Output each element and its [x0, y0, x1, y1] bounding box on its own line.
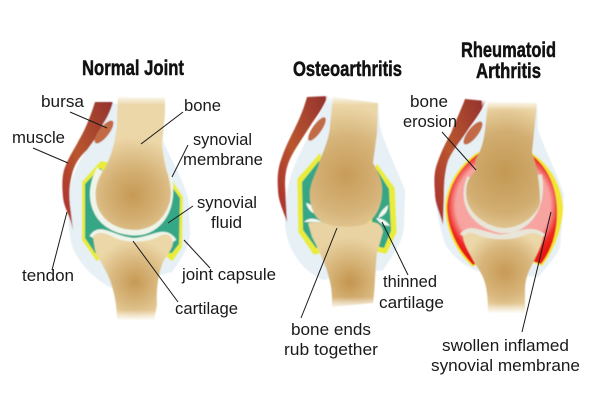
- muscle: [278, 96, 328, 222]
- upper bone: [96, 97, 171, 230]
- bursa: [460, 119, 486, 147]
- label: cartilage: [133, 241, 238, 318]
- upper bone fade: [112, 95, 170, 105]
- lower cartilage: [463, 232, 543, 238]
- label: thinned cartilage: [379, 222, 444, 312]
- label: synovial fluid: fluid: [211, 213, 242, 232]
- upper bone fade: [482, 100, 542, 110]
- synovial fluid left: [302, 161, 325, 248]
- title: Osteoarthritis: Osteoarthritis: [293, 58, 402, 81]
- joint capsule: [285, 97, 405, 280]
- upper cartilage: [468, 175, 539, 229]
- label: swollen inflamed synovial membrane: [431, 212, 580, 375]
- label: muscle: [12, 128, 68, 163]
- label: thinned cartilage: cartilage: [379, 293, 444, 312]
- lower bone: [463, 233, 543, 313]
- label: cartilage: cartilage: [175, 299, 238, 318]
- title: Rheumatoid Arthritis: Rheumatoid: [461, 39, 556, 62]
- label: joint capsule: joint capsule: [181, 265, 276, 284]
- lower bone fade: [112, 310, 162, 321]
- diagram: rheumatoid arthritis joint: [434, 99, 564, 314]
- label: bone erosion: bone: [410, 92, 448, 111]
- label: bursa: [41, 92, 107, 128]
- label: bone ends rub together: bone ends: [291, 320, 371, 339]
- label: synovial membrane: [172, 130, 263, 177]
- synovial fluid right: [372, 170, 391, 248]
- thinned cartilage right: [376, 205, 390, 226]
- title: Normal Joint: Normal Joint: [82, 57, 184, 80]
- lower bone: [308, 222, 383, 307]
- muscle: [62, 102, 113, 230]
- label: tendon: [22, 212, 74, 285]
- label: joint capsule: [181, 240, 276, 284]
- label: bursa: bursa: [41, 92, 85, 111]
- label: tendon: tendon: [22, 266, 74, 285]
- label: bone erosion: erosion: [403, 112, 457, 131]
- label: bone: [141, 96, 221, 144]
- synovial membrane: [83, 162, 182, 260]
- label: swollen inflamed synovial membrane: synovial membrane: [431, 356, 580, 375]
- synovial fluid: [85, 168, 180, 253]
- label: synovial fluid: [168, 193, 257, 232]
- thinned cartilage left: [304, 203, 322, 222]
- upper bone: [466, 102, 540, 228]
- label: bone: bone: [184, 96, 221, 115]
- synovial membrane right: [370, 165, 396, 253]
- diagram: osteoarthritis joint: [278, 95, 405, 309]
- label: thinned cartilage: thinned: [383, 272, 437, 291]
- label: synovial fluid: synovial: [197, 193, 257, 212]
- lower bone: [93, 233, 173, 320]
- label: swollen inflamed synovial membrane: swollen inflamed: [442, 336, 569, 355]
- bursa: [305, 115, 329, 143]
- label: bone ends rub together: [284, 228, 378, 359]
- lower bone fade: [326, 297, 378, 309]
- label: muscle: muscle: [12, 128, 65, 147]
- joint capsule: [68, 103, 190, 288]
- label: synovial membrane: membrane: [183, 150, 263, 169]
- title: Rheumatoid Arthritis: [461, 39, 556, 83]
- muscle: [434, 99, 486, 225]
- upper bone fade: [326, 95, 382, 105]
- diagram: normal joint: [62, 95, 190, 321]
- bursa: [91, 118, 117, 146]
- swollen membrane yellow rim: [445, 152, 563, 267]
- label: bone ends rub together: rub together: [284, 340, 378, 359]
- upper cartilage: [94, 170, 169, 231]
- label: bone erosion: [403, 92, 476, 170]
- lower bone fade: [484, 303, 530, 314]
- swollen inflamed membrane: [447, 154, 557, 265]
- synovial membrane left: [298, 154, 330, 254]
- joint capsule: [435, 102, 564, 277]
- label: synovial membrane: synovial: [193, 130, 252, 149]
- title: Rheumatoid Arthritis: Arthritis: [476, 60, 541, 83]
- lower cartilage: [93, 233, 173, 242]
- upper bone: [310, 97, 382, 227]
